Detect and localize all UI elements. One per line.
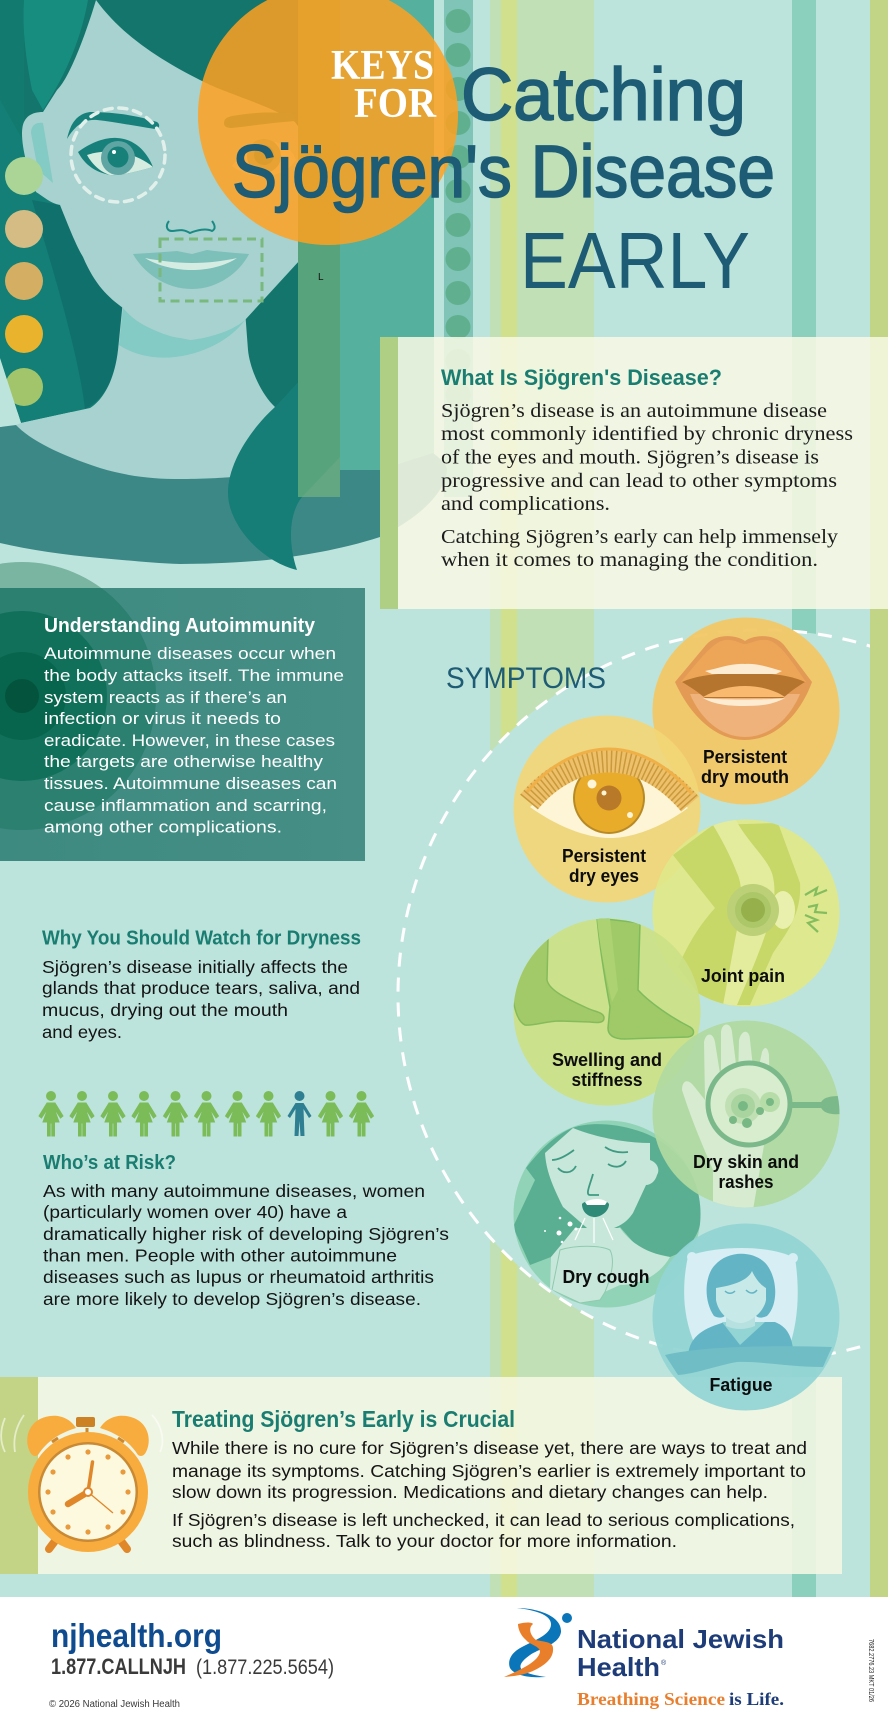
label: dry mouth [701, 766, 789, 787]
body text: what is: of the eyes and mouth. Sjögren’s disease is [441, 446, 819, 468]
body text: autoimmunity: cause inflammation and scarring, [44, 796, 327, 815]
phone numbers: 1.877.CALLNJH [51, 1654, 186, 1679]
section: who's at risk: diseases such as lupus or rheumatoid arthritis [43, 1267, 434, 1287]
body text: what is: when it comes to managing the condition. [441, 549, 818, 571]
label: Persistent [562, 845, 646, 866]
label: Dry skin and [693, 1151, 799, 1172]
panel: understanding autoimmunity [0, 562, 365, 861]
right eyebrow and eye [224, 113, 295, 128]
nose [167, 221, 215, 233]
section: why you should watch for dryness: and eyes. [42, 1022, 122, 1042]
icon: knee [673, 818, 800, 1005]
copyright: © 2026 National Jewish Health [49, 1699, 180, 1710]
logo: wordmark: ® [661, 1659, 667, 1667]
body text: autoimmunity: system reacts as if there’s an [44, 688, 287, 707]
symptom: dry eyes [514, 716, 700, 902]
section: why you should watch for dryness: mucus, drying out the mouth [42, 1000, 288, 1020]
logo: helix [504, 1608, 572, 1677]
section: who's at risk: (particularly women over 40) have a [43, 1202, 347, 1222]
bells [27, 1416, 76, 1456]
section: why you should watch for dryness: Why You Should Watch for Dryness [42, 928, 361, 950]
hair base [0, 0, 298, 412]
body text: autoimmunity: the body attacks itself. The immune [44, 666, 344, 685]
footer [0, 1597, 888, 1728]
label [693, 1151, 799, 1192]
logo: tagline: is Life. [729, 1689, 784, 1709]
phone numbers [51, 1654, 334, 1679]
body text: treating early [172, 1438, 807, 1551]
title: FOR [354, 81, 437, 127]
body text: treating early: manage its symptoms. Catching Sjögren’s earlier is extremely important to [172, 1461, 806, 1481]
body text: autoimmunity: among other complications. [44, 818, 282, 836]
section: who's at risk: Who’s at Risk? [43, 1152, 176, 1174]
label: Joint pain [701, 965, 785, 986]
title: Sjögren's Disease [232, 130, 775, 213]
section: why you should watch for dryness: Sjögren’s disease initially affects the [42, 957, 348, 977]
icon: coughing woman [513, 1124, 702, 1303]
label [701, 746, 789, 787]
symptom: fatigue [652, 1224, 840, 1410]
illustration: shirt and hair strand [0, 0, 447, 570]
body text: what is: Sjögren’s disease is an autoimmune disease [441, 400, 827, 422]
label [552, 1049, 662, 1090]
symptom: swelling and stiffness [510, 918, 700, 1106]
icon: lips [675, 636, 812, 740]
body text: treating early: slow down its progression. Medications and dietary changes can help. [172, 1482, 768, 1502]
background stripes [340, 0, 816, 1597]
heading: understanding autoimmunity: Understanding Autoimmunity [44, 615, 316, 637]
icon: pain bolts [805, 888, 827, 932]
title: Catching [461, 53, 746, 136]
panel: what is Sjögren's disease [380, 337, 888, 609]
illustration: woman's face [0, 0, 318, 490]
body text: what is: most commonly identified by chronic dryness [441, 423, 853, 445]
lower left hair [0, 100, 123, 423]
logo: tagline [577, 1689, 784, 1709]
ear [22, 112, 60, 205]
dashed mouth rectangle [160, 239, 262, 301]
heading: what is: What Is Sjögren's Disease? [441, 365, 722, 390]
section: who's at risk: are more likely to develop Sjögren’s disease. [43, 1289, 421, 1309]
body text: autoimmunity: the targets are otherwise healthy [44, 752, 324, 771]
left eyebrow [67, 112, 159, 139]
right edge stripe [870, 0, 888, 1597]
icon: sleeping woman [665, 1248, 832, 1375]
body text: what is: and complications. [441, 493, 610, 515]
section: who's at risk [43, 1152, 449, 1309]
logo: wordmark [577, 1624, 784, 1682]
hands [68, 1492, 88, 1504]
logo: wordmark: Health [577, 1652, 660, 1682]
symptom: dry skin and rashes [652, 1020, 842, 1210]
section: why you should watch for dryness [42, 928, 361, 1042]
icon: hand with magnifier [682, 1024, 842, 1210]
section: who's at risk: than men. People with other autoimmune [43, 1246, 397, 1266]
panel: treating early [0, 1377, 842, 1574]
title: EARLY [520, 216, 750, 305]
dashed eye circle [71, 108, 165, 202]
icon: alarm clock [1, 1415, 162, 1552]
label: dry eyes [569, 865, 639, 886]
body text: treating early: such as blindness. Talk to your doctor for more information. [172, 1531, 677, 1551]
bottom left wedge [0, 358, 21, 427]
neck [16, 300, 275, 490]
heading: symptoms: SYMPTOMS [446, 662, 606, 695]
label: Persistent [703, 746, 787, 767]
hammer [76, 1417, 95, 1427]
label: Fatigue [710, 1374, 772, 1395]
heading: treating early: Treating Sjögren’s Early is Crucial [172, 1406, 515, 1432]
vibration arcs [1, 1415, 162, 1452]
website: njhealth.org [51, 1617, 222, 1654]
label: Swelling and [552, 1049, 662, 1070]
body text: autoimmunity [44, 644, 344, 836]
body text: what is [441, 400, 853, 571]
section: who's at risk: As with many autoimmune diseases, women [43, 1181, 425, 1201]
title [232, 43, 775, 305]
small stray L mark: L [318, 272, 324, 283]
phone numbers: (1.877.225.5654) [196, 1656, 334, 1679]
label: stiffness [572, 1069, 642, 1090]
orange circle [198, 0, 458, 245]
label: Dry cough [562, 1266, 650, 1287]
body text: autoimmunity: infection or virus it needs to [44, 709, 281, 728]
label: rashes [718, 1171, 774, 1192]
mouth [133, 250, 249, 289]
face [40, 0, 318, 340]
label [562, 845, 646, 886]
left eye [78, 138, 153, 175]
neck shadow [119, 308, 245, 358]
symptom: joint pain [652, 818, 840, 1006]
title: KEYS [331, 43, 434, 89]
hour dots [45, 1449, 131, 1535]
icon: feet [510, 918, 694, 1039]
dashed symptoms circle [398, 630, 888, 1360]
feet [49, 1541, 127, 1549]
symptom: dry cough [513, 1120, 702, 1308]
section: why you should watch for dryness: glands that produce tears, saliva, and [42, 978, 360, 998]
light hair strand [23, 0, 88, 110]
section: who's at risk: dramatically higher risk of developing Sjögren’s [43, 1224, 449, 1244]
pictogram: people at risk [39, 1091, 374, 1136]
body text: what is: progressive and can lead to other symptoms [441, 470, 837, 492]
earrings [5, 157, 43, 195]
logo: tagline: Breathing Science [577, 1689, 725, 1709]
body text: what is: Catching Sjögren’s early can help immensely [441, 526, 838, 548]
body text: treating early: While there is no cure for Sjögren’s disease yet, there are ways to treat and [172, 1438, 807, 1458]
symptom: dry mouth [652, 618, 840, 804]
body text: autoimmunity: eradicate. However, in these cases [44, 731, 335, 750]
body text: autoimmunity: Autoimmune diseases occur when [44, 644, 336, 663]
icon: eye [527, 749, 692, 838]
body [28, 1432, 148, 1552]
body text: autoimmunity: tissues. Autoimmune diseases can [44, 774, 337, 793]
body text: treating early: If Sjögren’s disease is left unchecked, it can lead to serious complications, [172, 1510, 795, 1530]
job code: 7682.2776.23 MKT 01/26 [867, 1639, 874, 1702]
logo: wordmark: National Jewish [577, 1624, 784, 1654]
